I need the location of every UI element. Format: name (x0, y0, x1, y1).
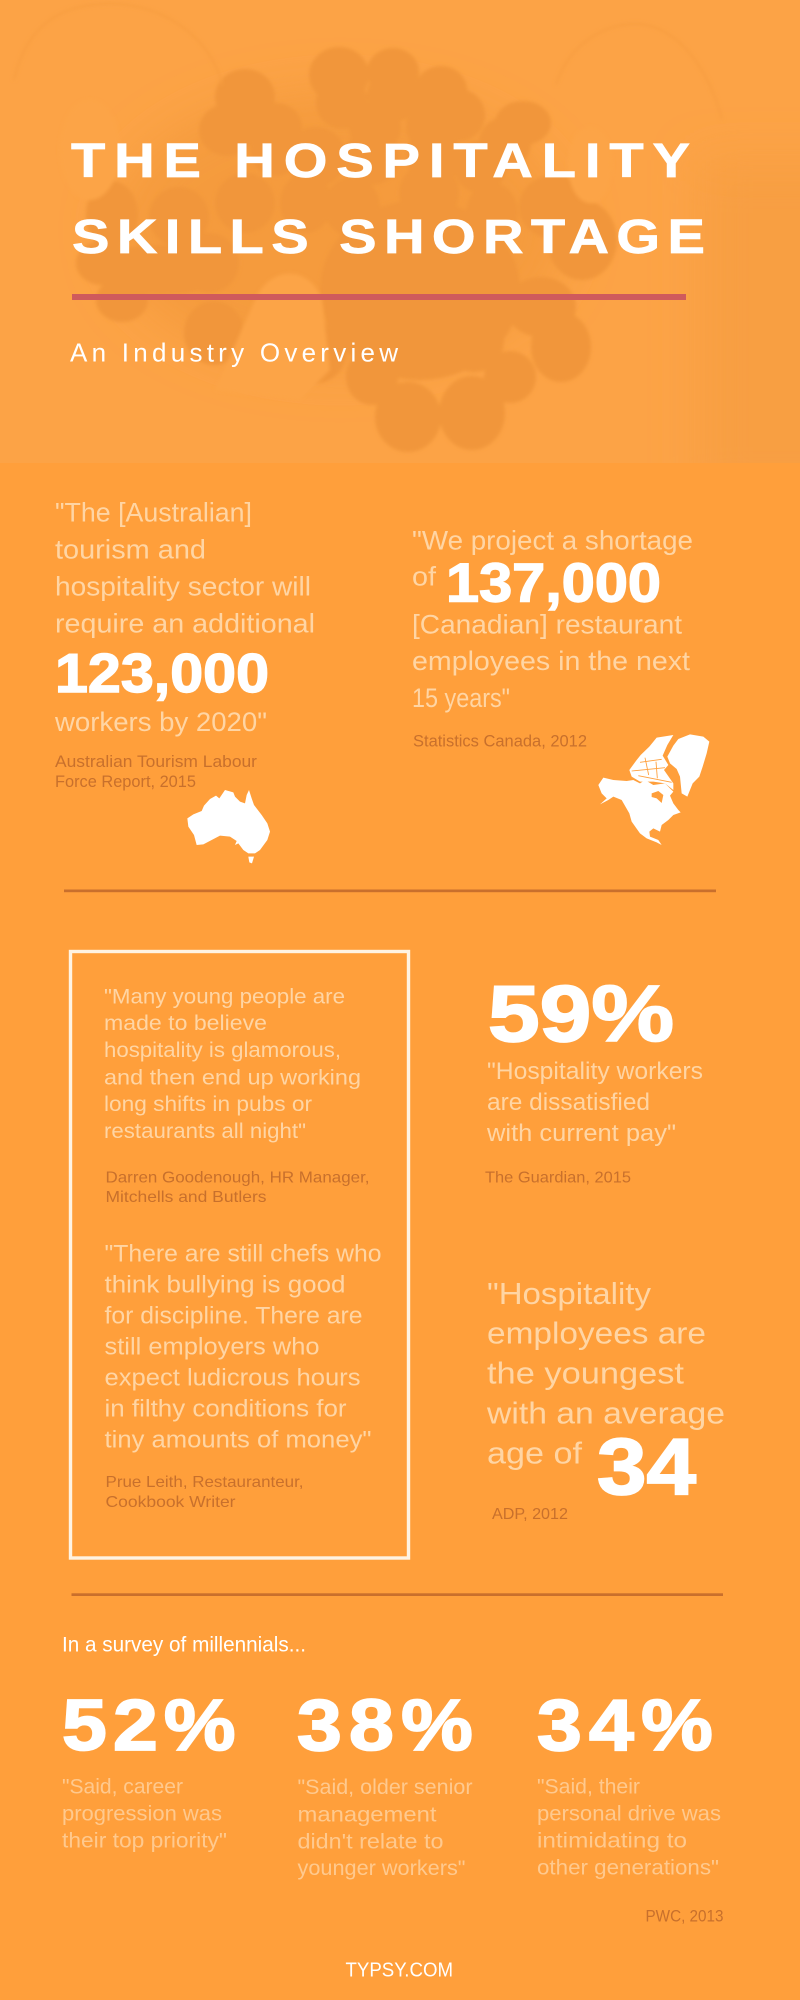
description: "Said, career (62, 1774, 183, 1798)
panel: survey stat 52% (62, 1686, 236, 1852)
source: Darren Goodenough (106, 1169, 370, 1206)
quote text (486, 1276, 725, 1470)
quote: Prue Leith: expect ludicrous hours (104, 1364, 360, 1391)
source (55, 753, 258, 791)
quote: Darren Goodenough (104, 985, 361, 1143)
description: their top priority" (62, 1828, 227, 1852)
quote text: "Hospitality (487, 1276, 652, 1311)
quote: Darren Goodenough: and then end up working (104, 1066, 361, 1089)
quote: Darren Goodenough: hospitality is glamorous, (104, 1039, 341, 1062)
panel: Canadian quote (412, 526, 709, 845)
quote text: the youngest (487, 1356, 684, 1391)
description: personal drive was (537, 1801, 721, 1825)
big number: 52%: 52% (62, 1686, 236, 1766)
panel: youngest employees (486, 1276, 725, 1523)
quote text: tourism and (55, 534, 206, 564)
quote: Prue Leith: tiny amounts of money" (104, 1426, 372, 1453)
quote: Prue Leith (104, 1240, 382, 1453)
quote text: "Hospitality workers (487, 1058, 703, 1085)
source: Prue Leith (106, 1474, 304, 1511)
description: didn't relate to (298, 1829, 444, 1853)
quote text: 15 years" (412, 683, 510, 713)
quote text: hospitality sector will (55, 572, 311, 602)
description: younger workers" (298, 1856, 466, 1880)
quote text (412, 526, 693, 713)
source: Prue Leith: Cookbook Writer (106, 1494, 236, 1511)
quote text: with an average (486, 1396, 725, 1430)
quote text (486, 1058, 703, 1147)
title: THE HOSPITALITY (71, 135, 690, 188)
panel: survey stat 34% (537, 1686, 721, 1879)
panel: header with grapes photo (0, 0, 800, 500)
subtitle: An Industry Overview (70, 338, 398, 368)
icon: map of North America and Greenland (598, 734, 709, 845)
quote text: employees are (487, 1316, 706, 1351)
quote text: with current pay" (486, 1120, 676, 1147)
description: intimidating to (537, 1828, 687, 1852)
quote text: are dissatisfied (487, 1089, 650, 1116)
big number: 34%: 34% (537, 1686, 713, 1766)
quote: Darren Goodenough: made to believe (104, 1012, 267, 1035)
source: The Guardian, 2015 (485, 1169, 631, 1186)
title underline (72, 294, 686, 300)
quote: Darren Goodenough: restaurants all night" (104, 1120, 306, 1143)
quote text: "We project a shortage (412, 526, 693, 556)
source: Australian Tourism Labour (55, 753, 258, 771)
big number: 38%: 38% (297, 1686, 473, 1766)
panel: bordered quotes box (70, 952, 408, 1558)
description (298, 1775, 472, 1880)
quote: Darren Goodenough: "Many young people are (104, 985, 345, 1008)
description: management (298, 1802, 437, 1826)
description: "Said, their (537, 1774, 640, 1798)
big number: 123,000: 123,000 (55, 642, 269, 704)
quote text: employees in the next (412, 646, 691, 676)
quote text: "The [Australian] (55, 498, 252, 528)
survey source: PWC, 2013 (646, 1908, 724, 1926)
panel: Australian quote (54, 498, 315, 863)
quote text: age of (487, 1435, 582, 1470)
description: other generations" (537, 1855, 719, 1879)
quote: Darren Goodenough: long shifts in pubs or (104, 1093, 312, 1116)
description (537, 1774, 721, 1879)
box outline (70, 952, 408, 1558)
panel: survey stat 38% (297, 1686, 473, 1880)
description: "Said, older senior (298, 1775, 472, 1799)
source: Force Report, 2015 (55, 773, 196, 791)
quote text: workers by 2020" (54, 707, 267, 737)
title: SKILLS SHORTAGE (72, 211, 705, 264)
source: Statistics Canada, 2012 (413, 732, 587, 750)
source: Darren Goodenough: Mitchells and Butlers (106, 1189, 266, 1206)
big number: 34: 34 (597, 1422, 697, 1511)
panel: 59% dissatisfied with pay (485, 969, 703, 1186)
big number: 137,000: 137,000 (446, 552, 661, 614)
source: ADP, 2012 (492, 1506, 568, 1523)
divider (64, 890, 716, 892)
quote text: [Canadian] restaurant (412, 610, 683, 640)
photo: blurred hands holding grapes (76, 48, 616, 452)
quote: Prue Leith: in filthy conditions for (104, 1396, 347, 1422)
quote text (54, 498, 315, 737)
footer: website: TYPSY.COM (346, 1960, 453, 1982)
quote text: of (412, 562, 437, 592)
description: progression was (62, 1801, 222, 1825)
quote: Prue Leith: think bullying is good (104, 1272, 346, 1298)
survey heading: In a survey of millennials... (62, 1633, 306, 1656)
icon: map of Australia (187, 790, 270, 863)
source: Darren Goodenough: Darren Goodenough, HR Manager, (106, 1169, 370, 1186)
description (62, 1774, 227, 1852)
source: Prue Leith: Prue Leith, Restauranteur, (106, 1474, 304, 1491)
quote: Prue Leith: still employers who (104, 1334, 320, 1360)
big number: 59%: 59% (488, 969, 674, 1058)
divider (72, 1593, 723, 1596)
quote: Prue Leith: "There are still chefs who (104, 1240, 382, 1267)
quote: Prue Leith: for discipline. There are (104, 1302, 362, 1329)
title (71, 135, 705, 264)
quote text: require an additional (55, 608, 315, 638)
